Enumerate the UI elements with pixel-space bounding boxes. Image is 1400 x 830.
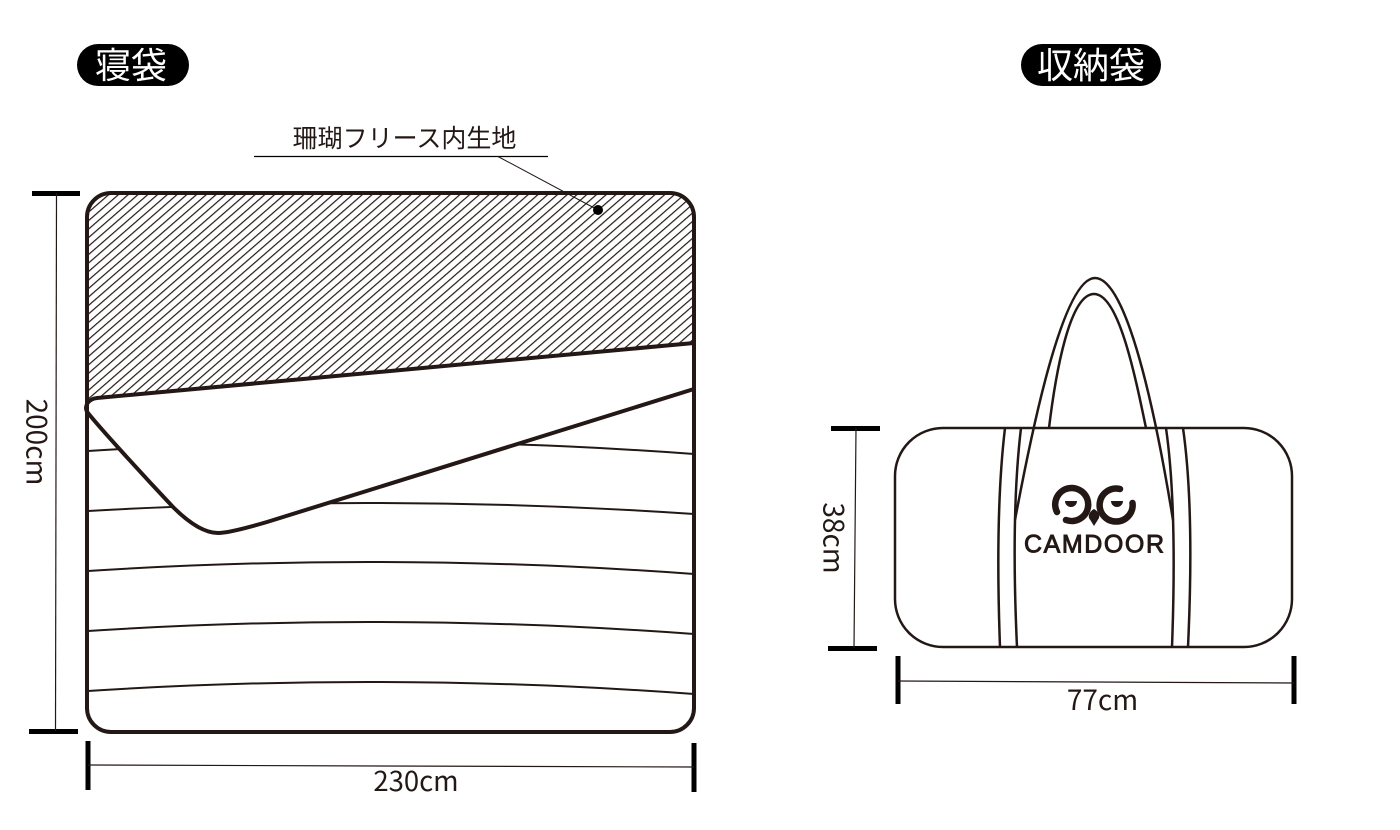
handle xyxy=(1015,278,1173,520)
outer outline xyxy=(87,193,694,732)
heading: sleeping bag xyxy=(77,37,189,89)
storage bag illustration xyxy=(895,278,1292,647)
logo: Camdoor owl: CAMDOOR xyxy=(1024,530,1164,558)
callout: coral fleece lining: 珊瑚フリース内生地 xyxy=(293,119,516,155)
dimension: 77cm width: 77cm xyxy=(1067,679,1138,719)
dimension: 77cm width xyxy=(896,656,1296,719)
dimension: 38cm height xyxy=(814,426,880,651)
callout: coral fleece lining xyxy=(254,119,603,215)
dimension: 230cm width: 230cm xyxy=(373,759,459,799)
fleece hatched area xyxy=(87,193,694,399)
straps on body xyxy=(998,428,1005,647)
bag body xyxy=(895,428,1292,647)
dimension: 230cm width xyxy=(86,741,696,799)
sleeping bag illustration xyxy=(86,193,694,732)
dimension: 200cm height xyxy=(18,191,80,734)
logo: Camdoor owl xyxy=(1024,488,1164,558)
dimension: 38cm height: 38cm xyxy=(814,502,854,574)
quilting lines xyxy=(88,442,694,694)
owl eyes xyxy=(1055,488,1133,522)
heading: storage bag: 収納袋 xyxy=(1037,37,1145,89)
folded flap xyxy=(86,343,694,533)
heading: sleeping bag: 寝袋 xyxy=(95,37,167,89)
dimension: 200cm height: 200cm xyxy=(18,399,58,485)
